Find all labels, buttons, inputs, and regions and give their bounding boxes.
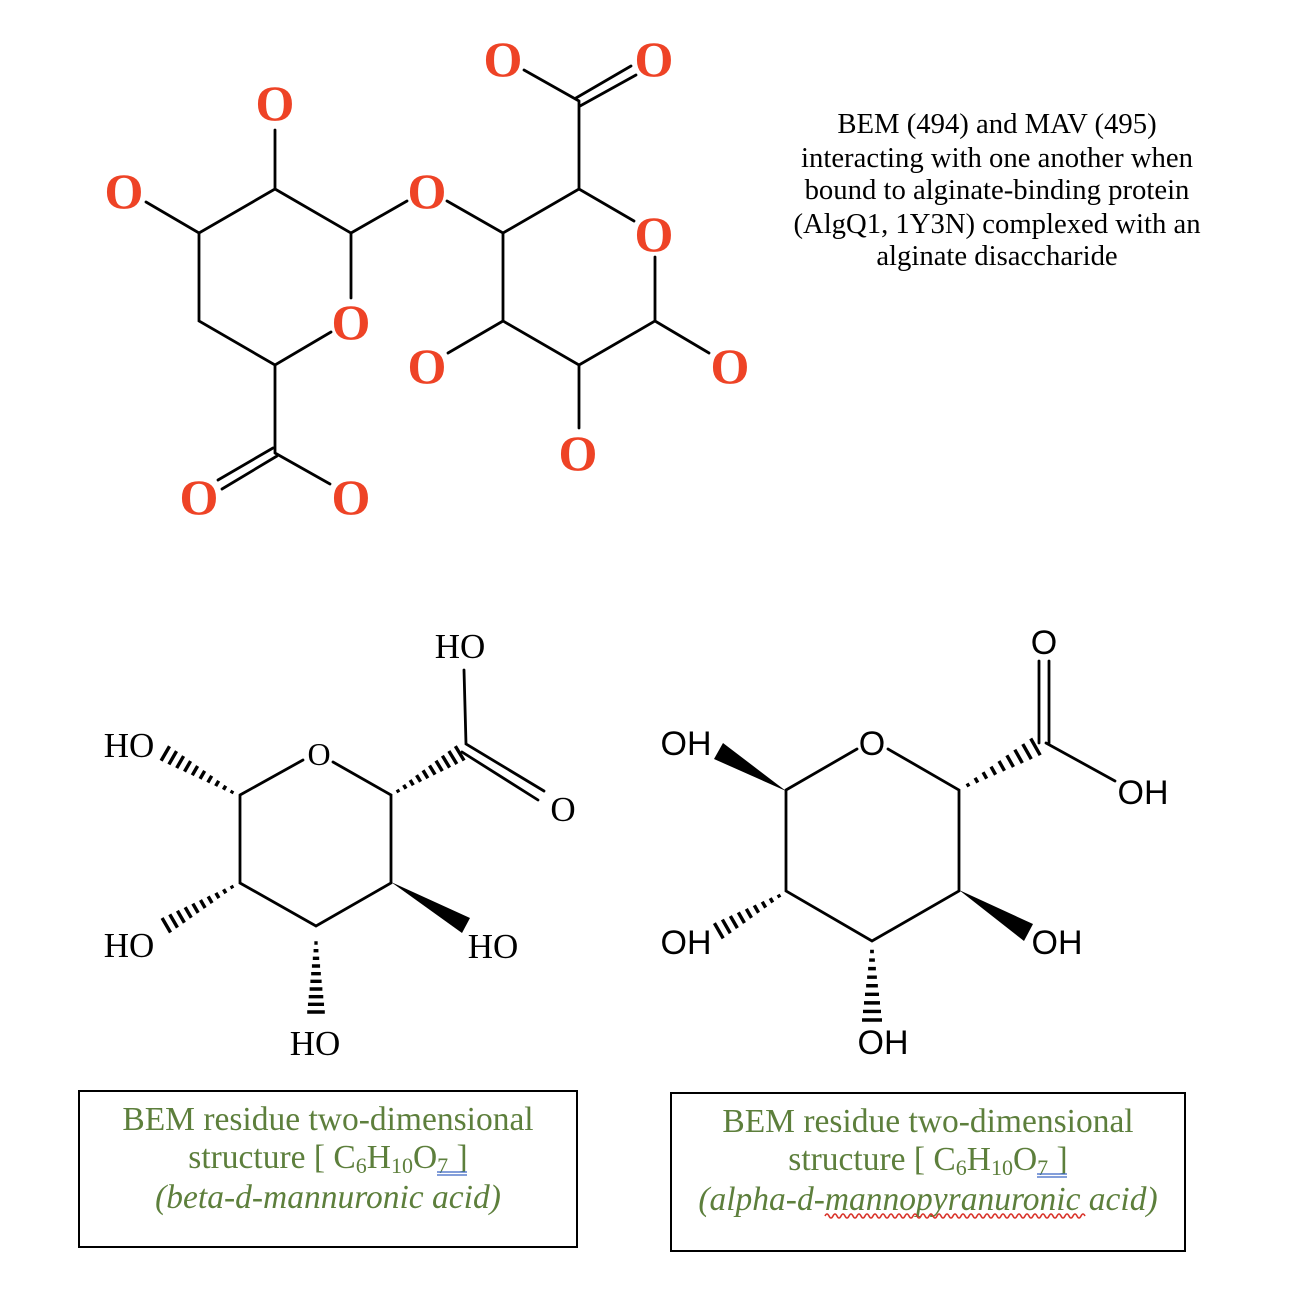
caption box: alpha-d-mannopyranuronic acid	[671, 1093, 1185, 1251]
oxygen atoms: O	[180, 469, 218, 525]
hashed and wedge bonds	[714, 738, 1040, 1020]
description text: interacting with one another when	[801, 142, 1193, 174]
caption box: alpha-d-mannopyranuronic acid: 6	[956, 1155, 967, 1180]
atom labels: HO	[104, 926, 154, 965]
oxygen atoms: O	[484, 31, 522, 87]
oxygen atoms: O	[256, 75, 294, 131]
description text: BEM (494) and MAV (495)	[837, 108, 1157, 140]
oxygen atoms: O	[635, 31, 673, 87]
oxygen atoms	[105, 31, 749, 525]
disaccharide structure	[105, 31, 749, 525]
ring and carboxyl bonds	[240, 670, 544, 926]
caption box: alpha-d-mannopyranuronic acid: (alpha-d-mannopyranuronic acid)	[698, 1181, 1158, 1218]
caption box: alpha-d-mannopyranuronic acid: 10	[991, 1155, 1013, 1180]
oxygen atoms: O	[408, 163, 446, 219]
atom labels: HO	[290, 1024, 340, 1063]
caption box: beta-d-mannuronic acid: (beta-d-mannuronic acid)	[155, 1179, 501, 1216]
caption box: beta-d-mannuronic acid: H	[367, 1139, 391, 1176]
caption box: alpha-d-mannopyranuronic acid: structure [ C	[788, 1141, 956, 1178]
atom labels	[660, 624, 1168, 1062]
atom labels	[104, 627, 576, 1063]
atom labels: O	[550, 790, 576, 829]
description text: bound to alginate-binding protein	[805, 174, 1189, 206]
caption box: beta-d-mannuronic acid: 10	[391, 1153, 413, 1178]
atom labels: HO	[468, 927, 518, 966]
caption box: alpha-d-mannopyranuronic acid: 7	[1037, 1155, 1048, 1180]
ring and carboxyl bonds	[786, 661, 1115, 941]
atom labels: OH	[660, 725, 712, 763]
hashed and wedge bonds	[161, 746, 470, 1012]
caption box: beta-d-mannuronic acid: BEM residue two-dimensional	[122, 1101, 534, 1138]
atom labels: O	[1031, 624, 1057, 662]
caption box: beta-d-mannuronic acid	[79, 1091, 577, 1247]
caption box: beta-d-mannuronic acid: O	[413, 1139, 437, 1176]
caption box: beta-d-mannuronic acid: 7	[437, 1153, 448, 1178]
caption box: alpha-d-mannopyranuronic acid: ]	[1048, 1141, 1068, 1178]
beta-d-mannuronic acid structure	[104, 627, 576, 1063]
caption box: beta-d-mannuronic acid: 6	[356, 1153, 367, 1178]
caption box: alpha-d-mannopyranuronic acid: BEM residue two-dimensional	[722, 1103, 1134, 1140]
oxygen atoms: O	[711, 338, 749, 394]
oxygen atoms: O	[635, 206, 673, 262]
description text: alginate disaccharide	[876, 240, 1118, 272]
oxygen atoms: O	[332, 469, 370, 525]
alpha-d-mannopyranuronic acid structure	[660, 624, 1168, 1062]
caption box: alpha-d-mannopyranuronic acid: O	[1013, 1141, 1037, 1178]
atom labels: HO	[435, 627, 485, 666]
atom labels: HO	[104, 726, 154, 765]
atom labels: O	[307, 736, 331, 772]
atom labels: OH	[660, 924, 712, 962]
oxygen atoms: O	[105, 163, 143, 219]
description text	[793, 108, 1201, 272]
atom labels: OH	[1118, 774, 1168, 812]
atom labels: OH	[1032, 924, 1082, 962]
oxygen atoms: O	[559, 425, 597, 481]
caption box: beta-d-mannuronic acid: ]	[448, 1139, 468, 1176]
atom labels: O	[859, 725, 885, 763]
oxygen atoms: O	[332, 294, 370, 350]
atom labels: OH	[858, 1024, 908, 1062]
oxygen atoms: O	[408, 338, 446, 394]
disaccharide bonds	[146, 66, 709, 489]
caption box: beta-d-mannuronic acid: structure [ C	[188, 1139, 356, 1176]
caption box: alpha-d-mannopyranuronic acid: H	[967, 1141, 991, 1178]
description text: (AlgQ1, 1Y3N) complexed with an	[793, 208, 1201, 240]
